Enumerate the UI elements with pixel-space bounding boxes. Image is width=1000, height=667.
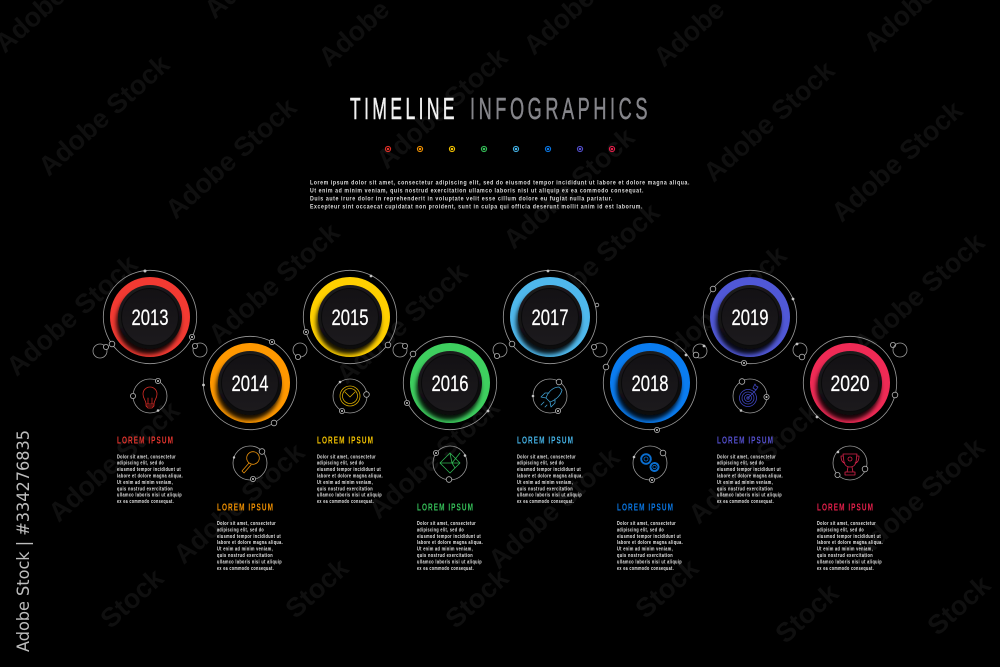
description: Dolor sit amet, consectetur <box>217 521 276 527</box>
color dot row <box>385 146 615 152</box>
description: labore et dolore magna aliqua. <box>317 474 383 480</box>
intro paragraph <box>310 180 690 210</box>
description <box>417 521 483 572</box>
description: ex ea commodo consequat. <box>217 566 274 572</box>
year: 2017 <box>532 305 568 330</box>
description: Dolor sit amet, consectetur <box>817 521 876 527</box>
milestone 2019 <box>703 270 807 505</box>
milestone 2018 <box>603 336 707 572</box>
milestone 2014 <box>202 336 307 572</box>
watermark pattern: Adobe Stock <box>160 91 303 225</box>
watermark pattern: Adobe Stock <box>848 226 991 360</box>
milestone 2015 <box>303 270 408 505</box>
description: ex ea commodo consequat. <box>117 499 174 505</box>
description: eiusmod tempor incididunt ut <box>617 534 681 540</box>
description <box>217 521 283 572</box>
description: quis nostrud exercitation <box>517 486 573 492</box>
title <box>350 92 651 126</box>
description: adipiscing elit, sed do <box>317 461 364 467</box>
intro paragraph: Ut enim ad minim veniam, quis nostrud exercitation ullamco laboris nisi ut aliquip ex ea commodo consequat. <box>310 188 644 194</box>
description: quis nostrud exercitation <box>717 486 773 492</box>
watermark pattern: Stock <box>280 552 355 624</box>
intro paragraph: Duis aute irure dolor in reprehenderit in voluptate velit esse cillum dolore eu fugiat nulla pariatur. <box>310 196 613 202</box>
description: ex ea commodo consequat. <box>317 499 374 505</box>
description: Dolor sit amet, consectetur <box>417 521 476 527</box>
description: quis nostrud exercitation <box>417 553 473 559</box>
description: eiusmod tempor incididunt ut <box>517 467 581 473</box>
description: quis nostrud exercitation <box>817 553 873 559</box>
milestone 2020 <box>803 336 907 572</box>
icon: envelope <box>433 446 467 482</box>
description: quis nostrud exercitation <box>317 486 373 492</box>
description: Ut enim ad minim veniam, <box>517 480 573 486</box>
description: adipiscing elit, sed do <box>817 527 864 533</box>
description: adipiscing elit, sed do <box>217 527 264 533</box>
description: eiusmod tempor incididunt ut <box>417 534 481 540</box>
description <box>817 521 883 572</box>
description <box>117 454 183 505</box>
description: ullamco laboris nisi ut aliquip <box>217 559 282 565</box>
watermark pattern: Adobe Stock <box>498 121 641 255</box>
year: 2016 <box>432 371 468 396</box>
intro paragraph: Excepteur sint occaecat cupidatat non proident, sunt in culpa qui officia deserunt mollit anim id est laborum. <box>310 204 643 210</box>
year: 2020 <box>830 371 870 396</box>
label: LOREM IPSUM <box>717 436 774 447</box>
description: eiusmod tempor incididunt ut <box>117 467 181 473</box>
watermark pattern: Adobe Stock <box>523 196 666 330</box>
description: adipiscing elit, sed do <box>117 461 164 467</box>
description: quis nostrud exercitation <box>217 553 273 559</box>
icon: light bulb <box>130 378 167 413</box>
description: Dolor sit amet, consectetur <box>117 454 176 460</box>
description: ullamco laboris nisi ut aliquip <box>717 493 782 499</box>
watermark pattern: Stock <box>440 562 515 634</box>
watermark pattern: Adobe Stock <box>43 394 186 528</box>
description: adipiscing elit, sed do <box>617 527 664 533</box>
description: labore et dolore magna aliqua. <box>617 540 683 546</box>
watermark pattern: Adobe Stock <box>1 248 144 382</box>
label: LOREM IPSUM <box>417 502 474 513</box>
icon: target <box>733 379 769 413</box>
description: ullamco laboris nisi ut aliquip <box>517 493 582 499</box>
watermark pattern: Stock <box>922 569 997 641</box>
watermark pattern: Adobe Stock <box>168 436 311 570</box>
year: 2013 <box>132 305 168 330</box>
watermark pattern: Adobe Stock <box>371 41 514 175</box>
title: INFOGRAPHICS <box>470 92 651 126</box>
watermark pattern: Adobe Stock <box>698 54 841 188</box>
description: ex ea commodo consequat. <box>517 499 574 505</box>
icon: rocket <box>532 379 567 414</box>
milestone 2016 <box>403 336 507 572</box>
description: labore et dolore magna aliqua. <box>117 474 183 480</box>
description: ex ea commodo consequat. <box>617 566 674 572</box>
icon: trophy <box>833 446 868 480</box>
description: adipiscing elit, sed do <box>417 527 464 533</box>
description: ullamco laboris nisi ut aliquip <box>417 559 482 565</box>
description: Dolor sit amet, consectetur <box>717 454 776 460</box>
description: labore et dolore magna aliqua. <box>717 474 783 480</box>
description: Ut enim ad minim veniam, <box>817 547 873 553</box>
description: Dolor sit amet, consectetur <box>617 521 676 527</box>
label: LOREM IPSUM <box>517 436 574 447</box>
label: LOREM IPSUM <box>317 436 374 447</box>
intro paragraph: Lorem ipsum dolor sit amet, consectetur adipiscing elit, sed do eiusmod tempor incididunt ut labore et dolore magna aliqua. <box>310 180 690 186</box>
description: ullamco laboris nisi ut aliquip <box>617 559 682 565</box>
description <box>717 454 783 505</box>
description: eiusmod tempor incididunt ut <box>217 534 281 540</box>
description: labore et dolore magna aliqua. <box>217 540 283 546</box>
description <box>517 454 583 505</box>
watermark pattern: Adobe Stock <box>363 391 506 525</box>
watermark pattern: Stock <box>770 577 845 649</box>
description: Ut enim ad minim veniam, <box>217 547 273 553</box>
description: ex ea commodo consequat. <box>717 499 774 505</box>
watermark pattern: Adobe Stock <box>483 441 626 575</box>
description: ullamco laboris nisi ut aliquip <box>117 493 182 499</box>
description: ex ea commodo consequat. <box>817 566 874 572</box>
description: adipiscing elit, sed do <box>517 461 564 467</box>
watermark pattern: Adobe Stock <box>33 48 176 182</box>
watermark pattern: Adobe Stock <box>650 239 793 373</box>
description: labore et dolore magna aliqua. <box>817 540 883 546</box>
watermark pattern: Adobe Stock <box>683 396 826 530</box>
milestone 2017 <box>503 270 607 505</box>
description: ullamco laboris nisi ut aliquip <box>817 559 882 565</box>
description: eiusmod tempor incididunt ut <box>317 467 381 473</box>
description: ex ea commodo consequat. <box>417 566 474 572</box>
description: ullamco laboris nisi ut aliquip <box>317 493 382 499</box>
stock id side text: Adobe Stock | #334276835 <box>14 430 33 652</box>
description: labore et dolore magna aliqua. <box>517 474 583 480</box>
description: Dolor sit amet, consectetur <box>517 454 576 460</box>
icon: clock <box>333 379 369 414</box>
description <box>317 454 383 505</box>
title: TIMELINE <box>350 92 458 126</box>
description: Ut enim ad minim veniam, <box>617 547 673 553</box>
description: Ut enim ad minim veniam, <box>717 480 773 486</box>
year: 2018 <box>632 371 668 396</box>
icon: gears <box>633 446 667 483</box>
year: 2014 <box>232 371 268 396</box>
milestone 2013 <box>93 270 207 505</box>
watermark pattern: Adobe Stock <box>203 216 346 350</box>
description: eiusmod tempor incididunt ut <box>717 467 781 473</box>
description: Ut enim ad minim veniam, <box>417 547 473 553</box>
description: adipiscing elit, sed do <box>717 461 764 467</box>
watermark pattern: Adobe Stock <box>331 256 474 390</box>
description: Ut enim ad minim veniam, <box>117 480 173 486</box>
description: labore et dolore magna aliqua. <box>417 540 483 546</box>
watermark pattern: Adobe Stock <box>826 94 969 228</box>
year: 2019 <box>732 305 768 330</box>
label: LOREM IPSUM <box>817 502 874 513</box>
label: LOREM IPSUM <box>617 502 674 513</box>
description: Ut enim ad minim veniam, <box>317 480 373 486</box>
description: eiusmod tempor incididunt ut <box>817 534 881 540</box>
watermark pattern: Stock <box>95 562 170 634</box>
icon: magnifier <box>233 446 267 482</box>
description <box>617 521 683 572</box>
label: LOREM IPSUM <box>217 502 274 513</box>
watermark pattern: Stock <box>630 552 705 624</box>
description: quis nostrud exercitation <box>617 553 673 559</box>
description: Dolor sit amet, consectetur <box>317 454 376 460</box>
watermark pattern: Adobe Stock <box>848 431 991 565</box>
year: 2015 <box>332 305 368 330</box>
label: LOREM IPSUM <box>117 436 174 447</box>
description: quis nostrud exercitation <box>117 486 173 492</box>
